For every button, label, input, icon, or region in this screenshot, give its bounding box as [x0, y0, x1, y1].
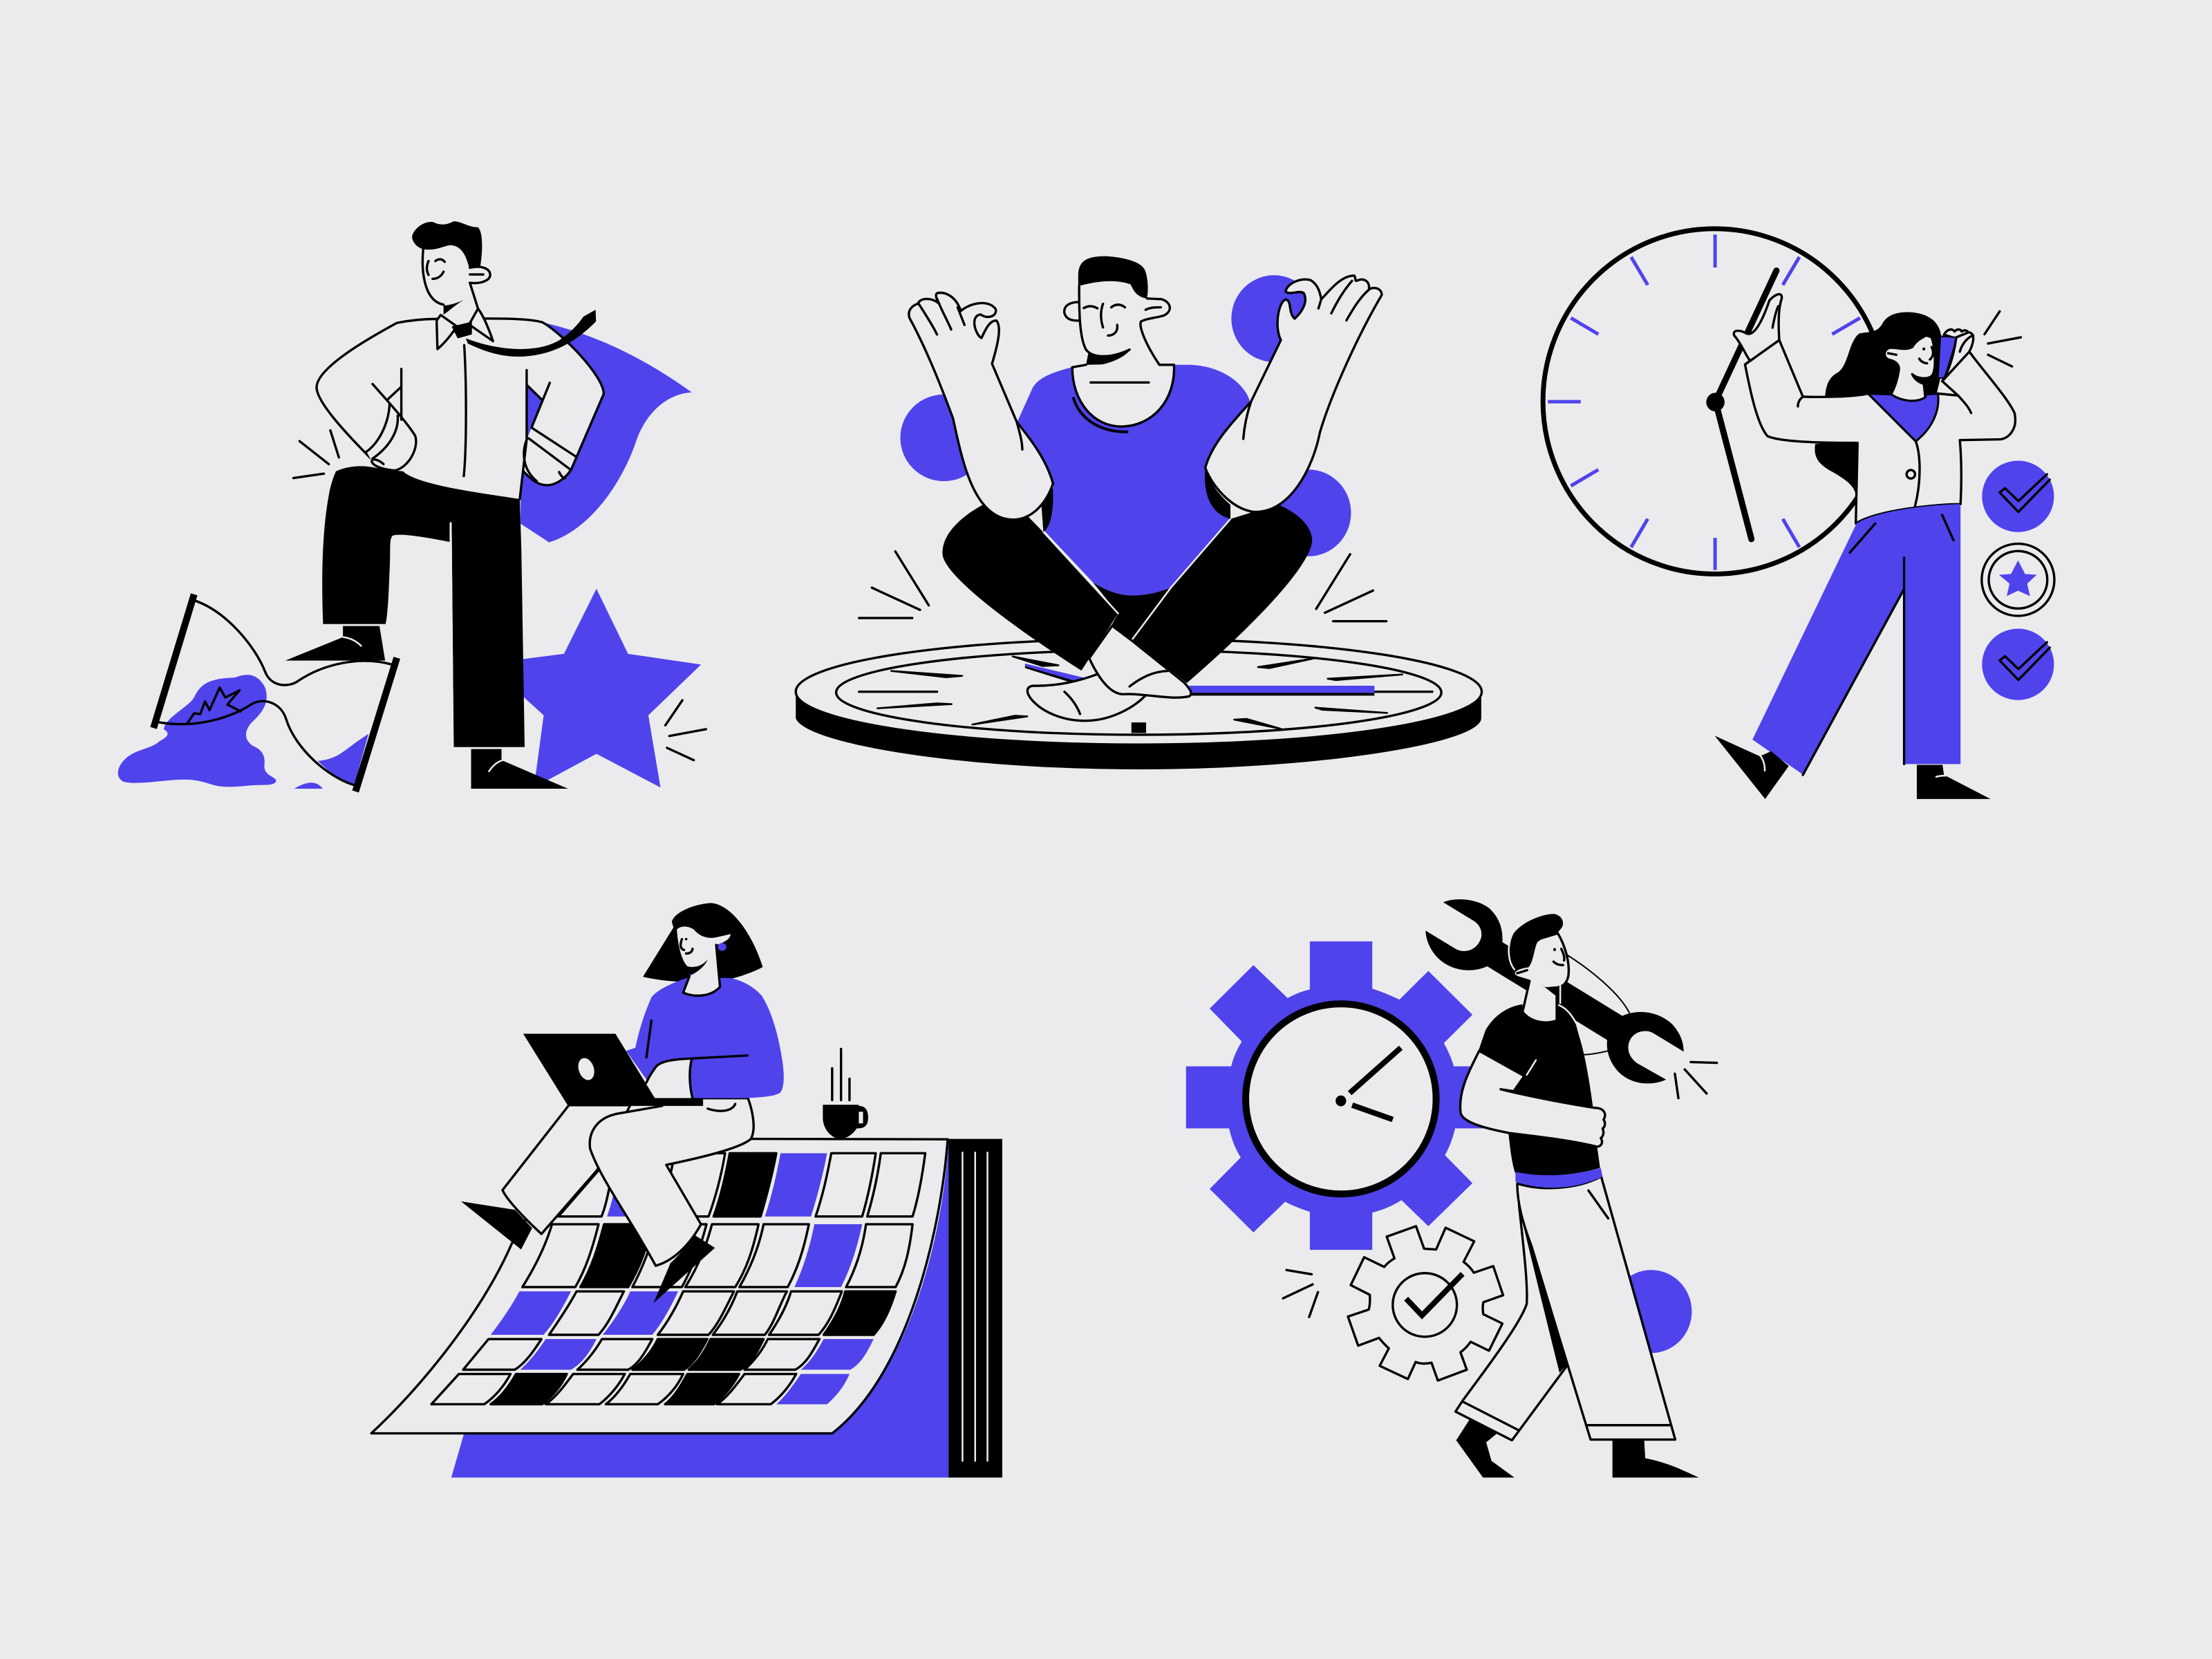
blouse neckline: [1868, 393, 1938, 441]
hourglass: [153, 594, 397, 791]
small gear with check: [1348, 1226, 1503, 1380]
t-shirt: [1018, 365, 1250, 595]
upper shoe: [285, 626, 385, 661]
trousers: [1752, 504, 1960, 775]
jacket button: [1906, 470, 1915, 478]
emphasis lines: [1283, 1062, 1717, 1317]
blue hem: [1515, 1168, 1602, 1188]
phone hand fingers: [1944, 330, 1969, 339]
right arm and hand on hip: [520, 370, 575, 499]
back arm: [1566, 955, 1629, 1055]
right shoe: [1917, 765, 1991, 799]
hand and sleeve: [646, 1020, 747, 1098]
front trouser leg: [1517, 1177, 1675, 1440]
collar and bow tie: [437, 308, 493, 349]
emphasis lines: [1985, 311, 2021, 366]
lower shoe: [471, 749, 568, 789]
check badge top: [1982, 460, 2054, 532]
large gear: [1186, 941, 1492, 1250]
arm and hand: [1460, 1051, 1605, 1147]
jacket details: [1798, 395, 1971, 506]
background circle: [1611, 1270, 1691, 1353]
cape: [521, 323, 692, 543]
arm gap: [527, 386, 542, 440]
left shoe: [1715, 735, 1789, 799]
right arm and hand: [1206, 276, 1382, 512]
scene: woman moving the clock hand while on the phone: [1543, 229, 2054, 799]
wrench: [1425, 899, 1684, 1083]
clock platform: [796, 639, 1482, 769]
left arm and hand on hip: [366, 369, 416, 471]
sand in lower bulb: [318, 734, 368, 785]
front shoe: [1613, 1440, 1699, 1478]
back leg: [1456, 1205, 1568, 1478]
blue shadow base: [451, 1141, 948, 1478]
leg gap line: [451, 523, 453, 747]
back leg: [503, 1105, 630, 1234]
back shoe: [461, 1201, 532, 1250]
black t-shirt: [1479, 1004, 1600, 1176]
calendar page: [371, 1139, 948, 1434]
hair: [1510, 914, 1563, 968]
phone: [1938, 336, 1957, 378]
front leg: [590, 1098, 753, 1266]
left arm and hand: [909, 293, 1053, 520]
feet: [1027, 626, 1191, 721]
front shoe: [653, 1235, 715, 1303]
phone hand: [1942, 332, 1974, 381]
large clock: [1543, 229, 1886, 574]
scene: superhero man stepping on a broken hourglass: [118, 221, 706, 791]
spilled sand: [118, 675, 276, 787]
calendar cells: [431, 1153, 926, 1404]
scene: man carrying a wrench beside gears: [1186, 899, 1717, 1478]
tie flying over shoulder: [466, 310, 596, 357]
face and neck: [1509, 933, 1568, 1022]
crossed legs: [942, 468, 1312, 683]
star badge: [1982, 544, 2054, 616]
head: [1065, 256, 1174, 432]
check badge bottom: [1982, 628, 2054, 700]
background circles: [900, 275, 1351, 556]
face: [1884, 335, 1935, 401]
shirt: [317, 319, 603, 499]
raised hand: [1734, 294, 1782, 364]
gear clock face: [1246, 1004, 1436, 1194]
star: [503, 589, 701, 787]
trousers: [322, 466, 525, 747]
scene: woman with laptop sitting on a calendar: [371, 903, 1002, 1478]
hair: [643, 903, 762, 982]
jacket: [1745, 340, 2015, 523]
calendar spine: [948, 1139, 1002, 1478]
sweater: [626, 974, 784, 1098]
face and neck: [677, 926, 731, 995]
emphasis lines: [859, 552, 1387, 621]
shirt placket: [464, 345, 466, 476]
coffee cup: [823, 1049, 868, 1139]
scene: man meditating on a clock: [796, 256, 1482, 769]
laptop: [523, 1034, 703, 1106]
hair: [1815, 312, 1941, 498]
emphasis lines: [294, 431, 706, 760]
head: [412, 221, 490, 315]
sand pile small: [294, 782, 323, 789]
